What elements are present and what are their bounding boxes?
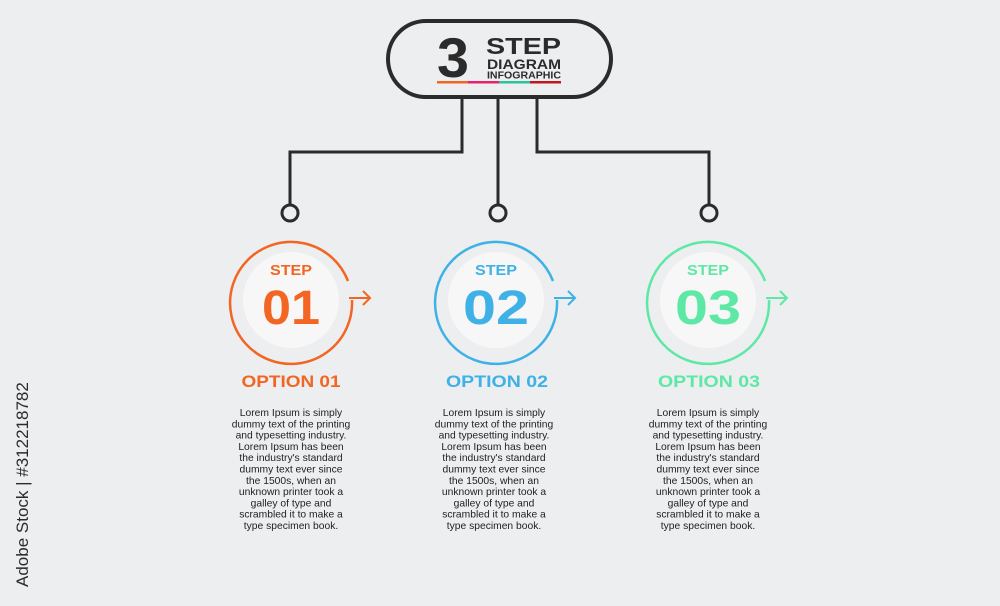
step 01: STEP — [270, 262, 312, 279]
step 03: STEP — [687, 262, 729, 279]
watermark id: Adobe Stock | #312218782 — [13, 382, 32, 587]
step 02: 02 — [463, 282, 529, 335]
body text columns: Lorem Ipsum has been — [238, 442, 344, 453]
body text columns: scrambled it to make a — [442, 510, 546, 521]
body text columns: the industry's standard — [442, 453, 546, 464]
body text columns: dummy text ever since — [442, 464, 546, 476]
body text columns: and typesetting industry. — [439, 431, 549, 442]
step 03: 03 — [675, 282, 741, 335]
body text columns: the industry's standard — [656, 453, 760, 464]
body text columns: unknown printer took a — [442, 487, 546, 498]
step 03 — [647, 242, 787, 364]
step 02: STEP — [475, 262, 517, 279]
body text columns: type specimen book. — [447, 521, 541, 532]
body text columns: galley of type and — [668, 498, 749, 509]
body text columns: dummy text ever since — [656, 464, 760, 476]
body text columns: and typesetting industry. — [236, 431, 346, 442]
body text columns: Lorem Ipsum is simply — [240, 408, 343, 419]
step 02 — [435, 242, 575, 364]
body text columns: the industry's standard — [239, 453, 343, 464]
connector lines — [282, 98, 717, 221]
body text columns: Lorem Ipsum is simply — [443, 408, 546, 419]
body text columns: dummy text of the printing — [435, 419, 554, 430]
body text columns — [232, 408, 768, 532]
body text columns: type specimen book. — [661, 521, 755, 532]
body text columns: unknown printer took a — [656, 487, 760, 498]
step 01: 01 — [262, 282, 320, 335]
body text columns: dummy text ever since — [239, 464, 343, 476]
title pill: DIAGRAM — [487, 56, 561, 72]
title pill: INFOGRAPHIC — [487, 70, 561, 82]
body text columns: the 1500s, when an — [449, 476, 539, 487]
step 01 — [230, 242, 370, 364]
body text columns: unknown printer took a — [239, 487, 343, 498]
option headings: OPTION 03 — [658, 372, 760, 391]
body text columns: type specimen book. — [244, 521, 338, 532]
option headings — [242, 372, 760, 391]
body text columns: dummy text of the printing — [649, 419, 768, 430]
body text columns: the 1500s, when an — [663, 476, 753, 487]
body text columns: Lorem Ipsum has been — [441, 442, 547, 453]
body text columns: the 1500s, when an — [246, 476, 336, 487]
body text columns: and typesetting industry. — [653, 431, 763, 442]
body text columns: scrambled it to make a — [239, 510, 343, 521]
body text columns: galley of type and — [251, 498, 332, 509]
body text columns: dummy text of the printing — [232, 419, 351, 430]
option headings: OPTION 02 — [446, 372, 548, 391]
title pill: STEP — [486, 33, 561, 59]
body text columns: Lorem Ipsum has been — [655, 442, 761, 453]
option headings: OPTION 01 — [242, 372, 340, 391]
body text columns: Lorem Ipsum is simply — [657, 408, 760, 419]
body text columns: scrambled it to make a — [656, 510, 760, 521]
title pill — [388, 21, 611, 97]
title pill: 3 — [437, 26, 469, 89]
body text columns: galley of type and — [454, 498, 535, 509]
